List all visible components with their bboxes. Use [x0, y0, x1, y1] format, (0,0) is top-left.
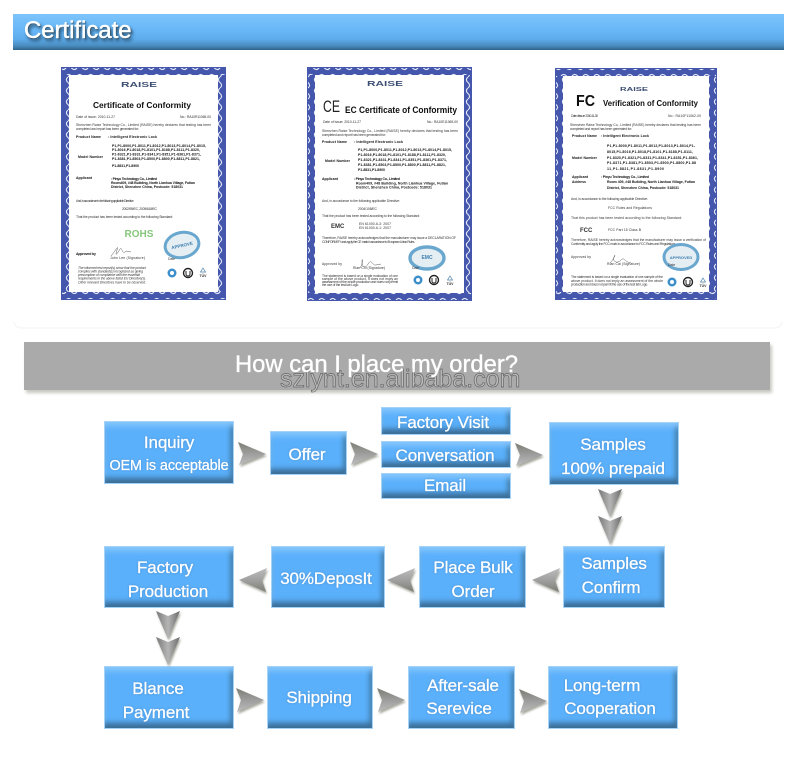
certificate 1: RoHS: Applicant — [76, 176, 93, 180]
arrow: payment to shipping — [236, 688, 264, 712]
certificate 3: FCC: District, Shenzhen China, Postcode: 518031 — [607, 186, 679, 190]
certificate 2: EC: completed and report has been generated for: — [322, 133, 386, 137]
logos — [668, 278, 707, 288]
step: Inquiry: Inquiry — [144, 433, 194, 452]
step: Factory Production: Factory — [137, 558, 193, 577]
certificate 2: EC: Shenzhen Raise Technology Co., Limited (RAISE) hereby declares that testing has been — [322, 129, 458, 133]
certificate 3: FCC: P1-8371,P1-8381,P1-8503,P1-8500,P1-8800,P1-88 — [607, 161, 696, 165]
certificate 1: RoHS: ROHS — [125, 229, 154, 240]
certificate 1: RoHS: P1-8831,P1-8900 — [112, 164, 139, 168]
step: Samples Confirm — [563, 546, 665, 608]
certificates section — [14, 67, 782, 328]
step: Shipping — [267, 666, 373, 729]
arrow: inquiry to offer — [238, 442, 266, 465]
certificate 3: FCC: 8015,P1-8016,P1-8018,P1-8101,P1-8188,P1-8111, — [607, 150, 693, 154]
certificate 3: FCC: P1-8320,P1-8321,P1-8331,P1-8341,P1-8351,P1-8361, — [607, 156, 698, 160]
step: Email: Email — [424, 476, 466, 495]
arrow: shipping to after-sale — [377, 688, 405, 712]
step: Place Bulk Order: Place Bulk — [433, 558, 513, 577]
certificate 3: FCC: 11,P1-8821,P1-8831,P1-8900 — [607, 167, 664, 171]
certificate 3: FCC: Address — [572, 180, 586, 184]
step: Samples 100% prepaid: 100% prepaid — [561, 459, 665, 478]
certificate 3: FCC: FC — [576, 93, 595, 110]
certificate 2: EC: No.: RA10E11065-00 — [427, 120, 458, 124]
certificate 2: EC: Applicant — [322, 177, 339, 181]
certificate 3: FCC: : Intelligent Electronic Lock — [601, 134, 649, 138]
step: Blance Payment: Payment — [123, 703, 189, 722]
arrow: production down 1 — [156, 611, 180, 639]
step: Conversation: Conversation — [396, 446, 494, 465]
certificate 1: RoHS: presumption of compliance with the essential — [77, 273, 140, 277]
certificate 2: EC: P1,P1-8000,P1-8011,P1-8012,P1-8013,P1-8014,P1-8015, — [358, 148, 452, 152]
step: Blance Payment — [104, 666, 234, 729]
certificate 2: EC: EN 61000-6-1: 2007 — [359, 226, 391, 230]
step: Factory Visit: Factory Visit — [397, 413, 489, 432]
panel outline — [14, 322, 782, 328]
certificate 3: FCC: Shenzhen Raise Technology Co., Limited (RAISE) hereby declares that testing has been — [570, 123, 701, 127]
stamp: approve: APPROVE — [171, 241, 193, 250]
stamp: approved — [664, 244, 698, 270]
certificate 1: RoHS: Shenzhen Raise Technology Co., Limited (RAISE) hereby declares that testing has been — [76, 123, 211, 127]
step: 30% Deposit: 30%DeposIt — [280, 569, 372, 588]
certificate 3: FCC: Applicant — [572, 175, 589, 179]
signature — [360, 260, 381, 268]
step: Samples Confirm: Samples — [581, 554, 647, 573]
certificate 2: EC: P1-8321,P1-8331,P1-8341,P1-8351,P1-8361,P1-8371, — [358, 158, 447, 162]
stamp: EMC — [410, 247, 444, 269]
certificate 3: FCC: That this product has been tested according to the following Standard: — [571, 216, 682, 220]
step: Inquiry: OEM is acceptable — [109, 458, 229, 474]
certificate 2: EC: Model Number — [325, 159, 351, 163]
certificate 1: RoHS: Room409, #48 Building, North Lianhua Village, Futian — [111, 181, 195, 185]
heading bar: How can I place my order — [24, 342, 770, 390]
step: Long-term Cooperation — [548, 666, 678, 729]
certificate 1: RoHS: P1,P1-8000,P1-8011,P1-8012,P1-8013,P1-8014,P1-8015, — [112, 144, 206, 148]
step: Inquiry — [104, 421, 234, 484]
step: Samples Confirm: Confirm — [582, 578, 640, 597]
certificate 1: RoHS: And, in accordance to the following applicable Directive: — [76, 199, 134, 203]
signature — [610, 255, 631, 263]
heading bar: How can I place my order: How can I place my order? — [235, 351, 518, 378]
certificate 3: FCC: Approved by — [571, 255, 591, 259]
certificate 2: EC: P1-8831,P1-8900 — [358, 168, 385, 172]
certificate 1: RoHS: Approved by — [76, 252, 96, 256]
certificate 1: RoHS: The informed test report(s) show that the product — [78, 266, 147, 270]
certificate 2: EC: Therefore, RAISE hereby acknowledges that the manufacturer may issue a DECLARATION OF — [322, 236, 456, 240]
certificate 3: FCC: production and does not permit the use of the test lab Logo. — [571, 282, 648, 286]
step: Samples 100% prepaid: Samples — [580, 435, 646, 454]
certificate 1: RoHS: No.: RA10R11065-00 — [180, 115, 211, 119]
arrow: samples down 2 — [598, 516, 622, 544]
stamp: approve — [163, 229, 201, 261]
certificate 1: RoHS: Date of issue: 2010-11-27 — [76, 115, 115, 119]
certificate 3: FCC: FCC Part 15 Class B — [608, 228, 642, 232]
certificate 2: EC: EMC — [331, 224, 345, 230]
certificate 1: RoHS: P1-8381,P1-8503,P1-8500,P1-8800,P1-8811,P1-8821, — [112, 157, 200, 161]
certificate 2: EC: Product Name — [322, 140, 347, 144]
step: Samples 100% prepaid — [549, 422, 679, 485]
step: 30% Deposit — [271, 546, 385, 608]
arrow: after-sale to cooperation — [519, 689, 547, 713]
certificate 1: RoHS: That the product has been tested according to the following Standard: — [76, 215, 173, 219]
step: Shipping: Shipping — [286, 688, 352, 707]
certificate 1: RoHS — [61, 67, 226, 300]
certificate 2: EC: That the product has been tested according to the following Standard: — [322, 214, 420, 218]
certificate 1: RoHS: Certificate of Conformity — [93, 100, 191, 110]
certificate 2: EC: assessment of the whole production and does not permit — [322, 280, 398, 284]
certificate 3: FCC: Product Name — [572, 134, 597, 138]
certificate 1: RoHS: P1-8016,P1-8018,P1-8101,P1-8188,P1-8111,P1-8320, — [112, 148, 200, 152]
step: Place Bulk Order — [419, 546, 526, 608]
certificate 2: EC: EC Certificate of Conformity — [345, 105, 457, 115]
certificate 2: EC: Rian Chi (Signature) — [353, 266, 385, 270]
arrow: contact to samples — [515, 443, 543, 466]
certificate 2: EC: : Intelligent Electronic Lock — [354, 140, 403, 144]
certificate 1: RoHS: complies with standard(s) recognized as giving — [78, 270, 143, 274]
step: Offer: Offer — [289, 445, 325, 464]
certificate 2: EC: The statement is based on a single evaluation of one — [322, 274, 398, 278]
stamp: EMC: EMC — [421, 255, 433, 261]
signature — [111, 248, 131, 256]
step: After-sale Serevice: Serevice — [426, 699, 492, 718]
certificate 3: FCC: FCC — [580, 228, 593, 234]
certificate 3: FCC: Room 409, #48 Building, North Lianhua Village, Futian — [607, 180, 695, 184]
arrow: deposit to production — [239, 568, 267, 592]
certificate 3: FCC: Conformity and apply the FCC mark in accordance to FCC Rules and Regulations. — [571, 242, 676, 246]
step: Place Bulk Order: Order — [452, 582, 494, 601]
certificate 1: RoHS: : Pinyu Technology Co., Limited — [111, 177, 157, 181]
certificate 2: EC: Date of issue: 2010-11-27 — [323, 120, 361, 124]
arrow: production down 2 — [156, 637, 180, 665]
certificate 2: EC: CE — [323, 97, 340, 116]
certificate 3: FCC: P1,P1-8000,P1-8011,P1-8012,P1-8013,P1-8014,P1- — [607, 144, 696, 148]
logos: TÜV — [200, 274, 207, 278]
heading bar: How can I place my order: szlynt.en.alibaba.com — [280, 365, 520, 393]
certificate 3: FCC: The statement is based on a single evaluation of one sample of the — [571, 275, 663, 279]
certificate 3: FCC: completed and report has been generated for: — [570, 127, 632, 131]
stamp: approved: APPROVED — [670, 255, 692, 260]
certificate 2: EC: the use of the test lab Logo. — [322, 283, 359, 287]
step: After-sale Serevice: After-sale — [427, 676, 499, 695]
certificate 1: RoHS: Other relevant Directives have to be observed. — [78, 280, 146, 284]
logos — [414, 276, 454, 286]
step: Email — [381, 473, 511, 499]
certificate 2: EC: CONFORMITY and apply the CE mark in accordance to European Union Rules. — [322, 240, 415, 244]
certificate 2: EC: RAISE — [367, 81, 404, 88]
step: Factory Production: Production — [128, 582, 208, 601]
step: Offer — [270, 431, 347, 475]
certificate 2: EC: District, Shenzhen China, Postcode: 518031 — [356, 186, 432, 190]
logos — [168, 268, 207, 278]
certificate 1: RoHS: requirements in the above listed EU Directive(s). — [78, 276, 146, 280]
certificate 1: RoHS: 2002/95/EC, 2005/618/EC — [122, 207, 158, 211]
certificate 2: EC: Date — [412, 266, 419, 270]
heading bar: Certificate — [13, 14, 784, 50]
certificate 3: FCC — [555, 68, 717, 300]
step: Factory Visit — [381, 407, 511, 435]
certificate 2: EC: Approved by — [322, 262, 342, 266]
certificate 3: FCC: No.: RA10F11062-00 — [668, 114, 701, 118]
certificate 2: EC: sample of the above product. It does not imply an — [322, 277, 398, 281]
certificate 3: FCC: Date of issue: 2010-11-30 — [571, 114, 598, 118]
certificate 1: RoHS: District, Shenzhen China, Postcode: 518031 — [111, 185, 183, 189]
certificate 2: EC: And, in accordance to the following applicable Directive: — [322, 199, 400, 203]
arrow: samples down 1 — [598, 489, 622, 517]
certificate 1: RoHS: completed and report has been generated for: — [76, 127, 139, 131]
certificate 3: FCC: Model Number — [572, 156, 598, 160]
certificate 1: RoHS: RAISE — [121, 82, 158, 89]
certificate 2: EC: EN 61000-6-3: 2007 — [359, 222, 391, 226]
step: Blance Payment: Blance — [132, 679, 184, 698]
certificate 1: RoHS: Date — [168, 257, 175, 261]
certificate 3: FCC: above product. It does not imply an assessment of the whole — [571, 279, 663, 283]
certificate 1: RoHS: : Intelligent Electronic Lock — [108, 135, 157, 139]
certificate 2: EC: P1-8016,P1-8018,P1-8101,P1-8188,P1-8111,P1-8320, — [358, 153, 446, 157]
step: Conversation — [381, 441, 511, 468]
step: Factory Production — [104, 546, 234, 608]
step: After-sale Serevice — [408, 666, 515, 729]
certificate 2: EC — [307, 67, 472, 301]
certificate 2: EC: P1-8381,P1-8503,P1-8500,P1-8800,P1-8811,P1-8821, — [358, 163, 446, 167]
step: Long-term Cooperation: Long-term — [564, 676, 640, 695]
heading bar: Certificate: Certificate — [24, 17, 132, 44]
arrow: confirm to bulk order — [532, 568, 560, 592]
certificate 3: FCC: : Pinyu Technology Co., Limited — [601, 175, 649, 179]
certificate 3: FCC: Verification of Conformity — [603, 99, 698, 108]
certificate 1: RoHS: Model Number — [78, 155, 104, 159]
certificate 1: RoHS: Product Name — [76, 135, 101, 139]
step: Long-term Cooperation: Cooperation — [564, 699, 656, 718]
certificate 2: EC: Room409, #48 Building, North Lianhua Village, Futian — [356, 182, 448, 186]
certificate 3: FCC: Rian Cai (Signature) — [607, 262, 640, 266]
certificate 2: EC: 2004/108/EC — [358, 207, 378, 211]
certificate 1: RoHS: P1-8321,P1-8331,P1-8341,P1-8351,P1-8361,P1-8371, — [112, 152, 201, 156]
logos: TÜV — [700, 284, 707, 288]
certificate 1: RoHS: John Lee (Signature) — [110, 256, 145, 260]
certificate 2: EC: : Pinyu Technology Co., Limited — [354, 177, 400, 181]
certificate 3: FCC: FCC Rules and Regulations — [608, 206, 652, 210]
certificate 3: FCC: Therefore, RAISE hereby acknowledges that the manufacturer may issue a verification of — [571, 238, 706, 242]
arrow: bulk order to deposit — [387, 568, 415, 592]
certificate 3: FCC: And, in accordance to the following applicable Directive: — [571, 197, 648, 201]
certificate 3: FCC: Date — [668, 263, 675, 267]
logos: TÜV — [446, 282, 454, 286]
certificate 3: FCC: RAISE — [620, 87, 649, 93]
arrow: offer to contact — [350, 442, 378, 465]
